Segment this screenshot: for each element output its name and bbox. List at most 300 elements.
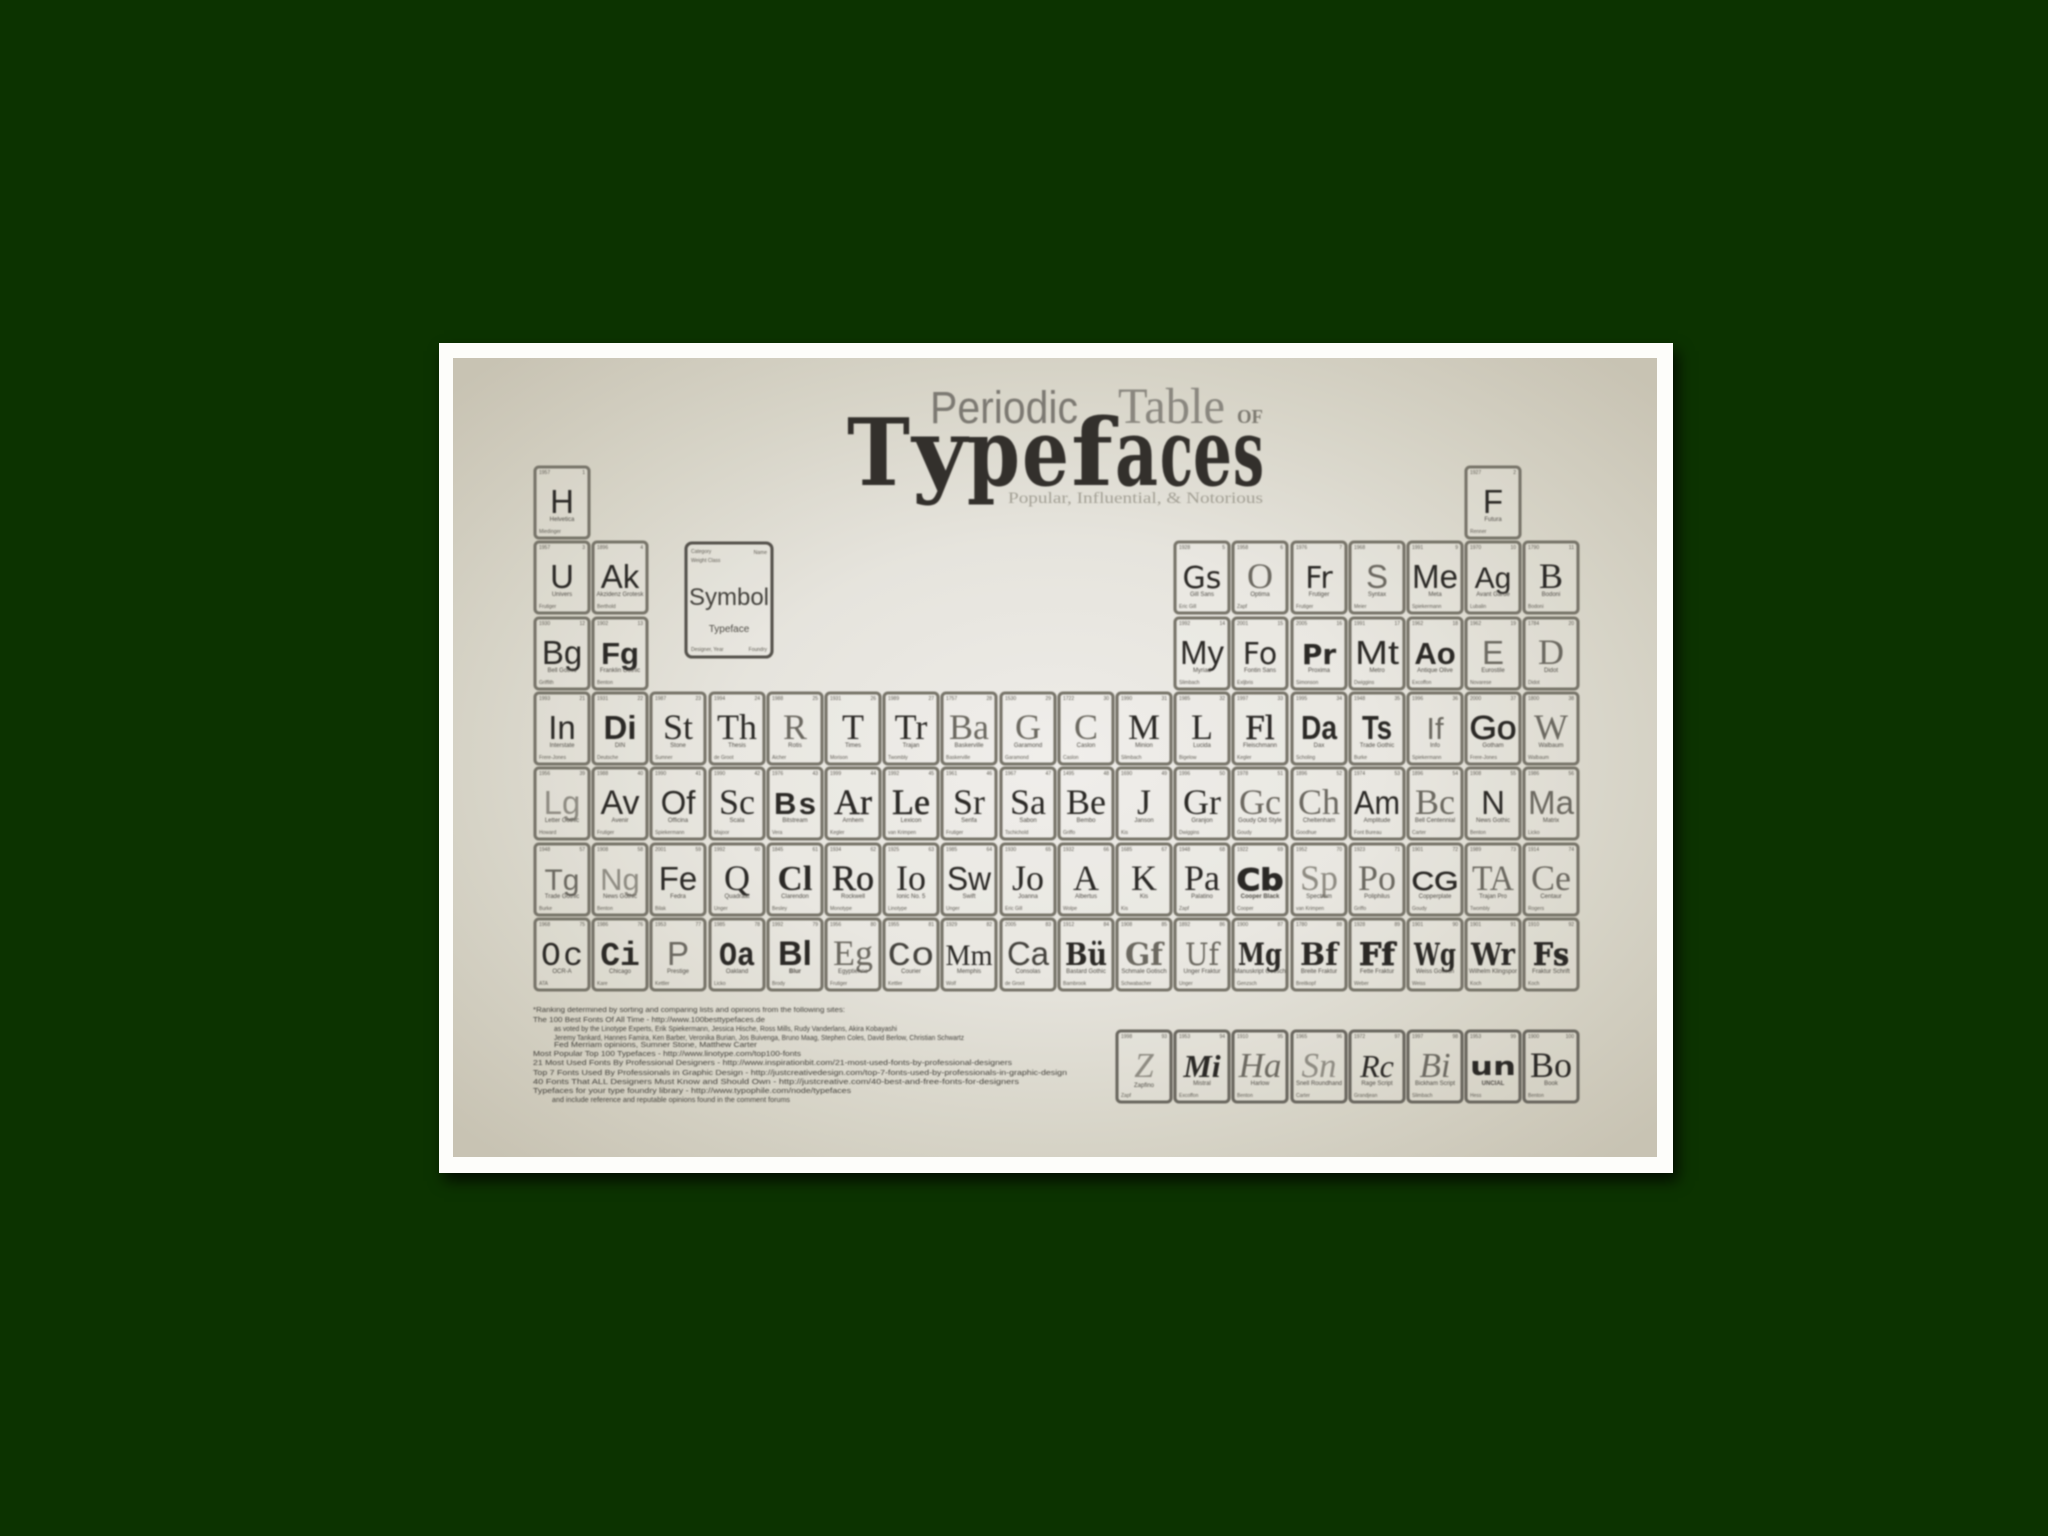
cell: Memphis: Memphis [957,969,981,975]
cell: Oakland: 1985 [714,922,725,928]
cell: Gill Sans: Gill Sans [1190,592,1214,598]
cell: Bank Gothic: Bell Gothic [547,668,577,674]
cell: blackletter Mg: Mg [1238,937,1282,973]
cell: Officina: 41 [695,771,701,777]
cell: Franklin Gothic: Benton [597,680,613,686]
legend cell: Foundry [749,647,767,653]
cell: Rotis: Rotis [788,743,802,749]
cell: Clarendon [768,844,822,915]
cell: Didot: 20 [1568,621,1574,627]
cell: Citizen: Kare [597,981,608,987]
cell: Matrix: 1986 [1528,771,1539,777]
cell: blackletter Bf: Bf [1300,937,1340,973]
cell: Courier: 81 [928,922,934,928]
cell: Snell Roundhand [1292,1031,1346,1102]
cell: Galliard: Goudy Old Style [1238,818,1283,824]
cell: blackletter Uf: Unger [1179,981,1193,987]
cell: Trade Gothic: Burke [1354,755,1367,761]
cell: Gill Sans: Eric Gill [1179,604,1196,610]
title block: e [1193,398,1232,507]
cell: Hobo: Benton [1237,1093,1253,1099]
cell: Rockwell: 62 [870,847,876,853]
cell: Palatino: 1948 [1179,847,1190,853]
cell: Janson [1117,768,1171,839]
cell: Poliphilus: 1923 [1354,847,1365,853]
cell: Lucida: 32 [1219,696,1225,702]
cell: Joanna: Joanna [1018,894,1039,900]
cell: Fontin: Fo [1243,637,1277,672]
cell: Info: If [1426,711,1444,746]
cell: Rockwell [826,844,880,915]
cell: News Gothic: 55 [1510,771,1516,777]
cell: Fontin: Fontin Sans [1244,668,1276,674]
cell: Frutiger: 1976 [1296,545,1307,551]
cell: Caslon: Caslon [1063,755,1079,761]
cell: Trade Gothic: 35 [1394,696,1400,702]
cell: Clarendon: 1845 [772,847,783,853]
cell: Letter Gothic: Howard [539,830,556,836]
legend cell: Name [754,550,767,556]
footnotes: *Ranking determined by sorting and comparing lists and opinions from the following sites: [533,1007,845,1014]
cell: Trajan light: Twombly [1470,906,1490,912]
cell: Mt: 1991 [1354,621,1365,627]
cell: Arnhem: Ar [834,782,872,822]
cell: blackletter Mg [1233,919,1287,990]
cell: Courier: Kettler [888,981,903,987]
title block: T [847,398,910,507]
cell: Info [1408,693,1462,764]
cell: Sabon [1001,768,1055,839]
cell: OCR A: Oc [541,938,583,975]
cell: Helvetica: 1957 [539,470,550,476]
cell: Didot: D [1538,632,1564,672]
cell: Meta: 1991 [1412,545,1423,551]
cell: Myriad [1175,618,1229,689]
cell: blackletter Gf: Schmale Gotisch [1121,969,1167,975]
cell: Arnhem: Kegler [830,830,845,836]
cell: Spectrum: 1952 [1296,847,1307,853]
cell: Futura: 1927 [1470,470,1481,476]
cell: OCR A [535,919,589,990]
cell: blackletter Ff: Fette Fraktur [1360,969,1394,975]
cell: Mt: Mt [1355,634,1399,671]
cell: blackletter Gf: Schwabacher [1121,981,1152,987]
cell: Zapfino: 1998 [1121,1034,1132,1040]
cell: Centaur: Ce [1531,858,1571,898]
cell: News Gothic [1466,768,1520,839]
cell: Stone [651,693,705,764]
cell: Bembo: 1495 [1063,771,1074,777]
cell: Cheltenham [1292,768,1346,839]
cell: Copperplate Gothic: 72 [1452,847,1458,853]
cell: Minion: M [1128,707,1160,747]
cell: Avenir: 1988 [597,771,608,777]
cell: Hobo [1233,1031,1287,1102]
cell: Baskerville [942,693,996,764]
cell: Didot [1524,618,1578,689]
cell: Bank Gothic: 12 [579,621,585,627]
cell: Trade Gothic light [535,844,589,915]
cell: Georgia [1175,768,1229,839]
cell: Antique Olive: Ao [1414,636,1456,671]
cell: Avenir: 40 [637,771,643,777]
cell: Bodoni Ornate: Book [1544,1081,1559,1087]
footnotes: 21 Most Used Fonts By Professional Designers - http://www.inspirationbit.com/21-most-used-fonts-by-professional-designers [533,1060,1013,1067]
cell: Garamond: Garamond [1014,743,1042,749]
cell: blackletter Ff: Weber [1354,981,1369,987]
cell: Prestige: P [667,935,689,972]
cell: Lexicon: Lexicon [901,818,921,824]
cell: Akzidenz Grotesk: 1896 [597,545,608,551]
cell: Helvetica [535,467,589,538]
cell: Janson: Janson [1134,818,1154,824]
cell: Optima: 1958 [1237,545,1248,551]
cell: Times: T [842,707,864,747]
cell: Centaur [1524,844,1578,915]
cell: DIN: 1931 [597,696,608,702]
cell: Clarendon: Cl [778,859,813,898]
cell: Bodoni: Bodoni [1528,604,1544,610]
cell: Bs: Bs [774,786,816,821]
cell: blackletter Wr: 91 [1510,922,1516,928]
cell: Eurostile: 1962 [1470,621,1481,627]
cell: Garamond: 1530 [1005,696,1016,702]
cell: Minion: Minion [1135,743,1153,749]
cell: Egyptienne [826,919,880,990]
cell: Interstate: Interstate [549,743,575,749]
cell: News Gothic light: 1908 [597,847,608,853]
cell: blackletter Wg: Weiss [1412,981,1426,987]
cell: Uncial: 99 [1510,1034,1516,1040]
cell: News Gothic light: Ng [600,862,640,897]
cell: Avant Garde: 10 [1510,545,1516,551]
cell: blackletter Wr: 1901 [1470,922,1481,928]
cell: Bickham Script: 98 [1452,1034,1458,1040]
cell: Trajan light: TA [1472,858,1514,898]
cell: DIN: 22 [637,696,643,702]
cell: Swift: 1985 [946,847,957,853]
cell: Galliard [1233,768,1287,839]
cell: Courier: Co [888,938,934,975]
cell: Trade Gothic: Ts [1362,709,1392,746]
cell: Proxima: 16 [1336,621,1342,627]
footnotes: Jeremy Tankard, Hannes Famira, Ken Barber, Veronika Burian, Jos Buivenga, Bruno Maag, Stephen Coles, David Berlow, Christian Schwartz [554,1035,964,1042]
cell: Trade Gothic light: Burke [539,906,552,912]
cell: Joanna: Eric Gill [1005,906,1022,912]
cell: Janson: Kis [1121,830,1128,836]
cell: Frutiger: Fr [1305,561,1333,596]
cell: Letter Gothic: Letter Gothic [545,818,579,824]
cell: Egyptienne: Eg [833,933,873,973]
cell: Garamond: Garamond [1005,755,1029,761]
cell: Spectrum: 70 [1336,847,1342,853]
cell: Fedra: 59 [695,847,701,853]
cell: Matrix [1524,768,1578,839]
cell: Egyptienne: Frutiger [830,981,848,987]
cell: Scala: 1990 [714,771,725,777]
cell: Optima: 6 [1280,545,1283,551]
cell: Syntax: 8 [1397,545,1400,551]
cell: Optima: O [1247,556,1273,596]
cell: Gill Sans [1175,542,1229,613]
cell: Zapfino [1117,1031,1171,1102]
cell: Walbaum: W [1534,707,1568,747]
cell: Univers: U [550,558,574,595]
cell: Akzidenz Grotesk: Ak [601,558,640,595]
cell: Memphis: Mm [946,939,992,972]
cell: OCR A: 1968 [539,922,550,928]
cell: blackletter Gf [1117,919,1171,990]
cell: Dax: Dax [1314,743,1324,749]
cell: Gill Sans: 5 [1222,545,1225,551]
cell: Joanna: 1930 [1005,847,1016,853]
cell: OCR A: ATA [539,981,549,987]
cell: Meta: Meta [1428,592,1442,598]
cell: Franklin Gothic [593,618,647,689]
cell: Dax: 34 [1336,696,1342,702]
cell: Blur: Bl [778,935,812,973]
cell: Gotham: Go [1470,709,1516,746]
cell: Georgia: Granjon [1191,818,1213,824]
cell: Gill Sans: Gs [1183,561,1221,596]
cell: blackletter Ff: Ff [1359,937,1397,973]
cell: Trajan [884,693,938,764]
cell: Lexicon [884,768,938,839]
cell: Swift: Swift [962,894,976,900]
cell: Bank Gothic [535,618,589,689]
cell: Bembo: 48 [1103,771,1109,777]
cell: Ionic: Linotype [888,906,907,912]
cell: Consolas: de Groot [1005,981,1025,987]
cell: blackletter Mg: Manuskript Gotisch [1234,969,1286,975]
cell: Trade Gothic [1350,693,1404,764]
cell: Minion: 1990 [1121,696,1132,702]
cell: Fleischmann [1233,693,1287,764]
cell: Cooper Black [1233,844,1287,915]
cell: Mistral: 94 [1219,1034,1225,1040]
cell: Memphis: 1929 [946,922,957,928]
cell: Info: 36 [1452,696,1458,702]
cell: Kis: K [1131,858,1157,898]
cell: Avenir: Avenir [612,818,628,824]
cell: Spectrum: Sp [1300,858,1338,898]
cell: Helvetica: Miedinger [539,529,561,535]
footnotes: 40 Fonts That ALL Designers Must Know and Should Own - http://justcreative.com/40-best-and-free-fonts-for-designers [533,1079,1020,1086]
cell: Thesis: Th [717,707,757,747]
cell: Ionic: Io [896,858,926,898]
cell: Citizen: Chicago [609,969,632,975]
cell: Trade Gothic: Trade Gothic [1360,743,1394,749]
cell: Myriad: 14 [1219,621,1225,627]
cell: Courier: Courier [901,969,921,975]
cell: Bodoni [1524,542,1578,613]
cell: Minion [1117,693,1171,764]
cell: blackletter Uf: 86 [1219,922,1225,928]
cell: Antique Olive: Excoffon [1412,680,1432,686]
cell: Akzidenz Grotesk: Akzidenz Grotesk [596,592,645,598]
cell: blackletter Wr [1466,919,1520,990]
cell: Mt [1350,618,1404,689]
cell: Fleischmann: Kegler [1237,755,1252,761]
cell: Arnhem: 44 [870,771,876,777]
cell: Officina: Spiekermann [655,830,685,836]
cell: Trade Gothic light: 57 [579,847,585,853]
cell: blackletter Ff: 89 [1394,922,1400,928]
cell: Galliard: Gc [1239,782,1281,822]
cell: Ionic: Ionic No. 5 [897,894,926,900]
cell: Scala: Sc [719,782,755,822]
footnotes: The 100 Best Fonts Of All Time - http://www.100besttypefaces.de [533,1017,765,1024]
cell: Bickham Script: Slimbach [1412,1093,1433,1099]
cell: Optima: Optima [1250,592,1270,598]
cell: Trajan: Twombly [888,755,908,761]
cell: Blur: 79 [812,922,818,928]
cell: Mistral: 1953 [1179,1034,1190,1040]
cell: Scala: Majoor [714,830,730,836]
legend cell: Symbol [689,584,769,611]
cell: Univers: Frutiger [539,604,557,610]
cell: Swift: Sw [947,860,991,897]
cell: Times: Times [845,743,861,749]
legend cell: Typeface [709,624,750,635]
cell: Avenir: Frutiger [597,830,615,836]
cell: Kis: 67 [1161,847,1167,853]
cell: Kis: Kis [1140,894,1148,900]
cell: Times: Morison [830,755,848,761]
cell: Snell Roundhand: Carter [1296,1093,1310,1099]
cell: Citizen: Ci [600,938,640,975]
cell: Officina [651,768,705,839]
cell: Syntax: Meier [1354,604,1367,610]
cell: Snell Roundhand: 1965 [1296,1034,1307,1040]
cell: Kis: 1685 [1121,847,1132,853]
cell: Consolas: Consolas [1015,969,1041,975]
cell: Sr: Frutiger [946,830,964,836]
cell: Centaur: Rogers [1528,906,1545,912]
cell: blackletter Fs [1524,919,1578,990]
cell: Dax: Da [1301,709,1338,746]
cell: Poliphilus: 71 [1394,847,1400,853]
footnotes: Typefaces for your type foundry library - http://www.typophile.com/node/typefaces [533,1088,852,1095]
cell: blackletter Bü: Bastard Gothic [1066,969,1106,975]
cell: Hobo: Harlow [1251,1081,1270,1087]
cell: blackletter Bü: 1912 [1063,922,1074,928]
cell: American Typewriter [1350,768,1404,839]
cell: Meta: 9 [1455,545,1458,551]
cell: News Gothic light: 58 [637,847,643,853]
cell: Eurostile: Eurostile [1481,668,1505,674]
cell: Swift: Unger [946,906,960,912]
cell: Ionic [884,844,938,915]
cell: Stone: 1987 [655,696,666,702]
cell: Bickham Script: Bi [1419,1046,1451,1085]
cell: Uncial: Hess [1470,1093,1482,1099]
cell: Bodoni Ornate [1524,1031,1578,1102]
cell: Bs: 1976 [772,771,783,777]
cell: Mt: Metro [1369,668,1385,674]
cell: Lucida: L [1191,707,1213,747]
cell: Janson: 49 [1161,771,1167,777]
cell: blackletter Bf [1292,919,1346,990]
cell: Thesis: 24 [754,696,760,702]
cell: Univers: 1957 [539,545,550,551]
cell: Garamond [1001,693,1055,764]
cell: Optima [1233,542,1287,613]
cell: Oakland: Licko [714,981,726,987]
cell: News Gothic: 1908 [1470,771,1481,777]
cell: Walbaum: Walbaum [1528,755,1549,761]
cell: Hobo: Ha [1238,1046,1281,1085]
cell: Hobo: 95 [1277,1034,1283,1040]
cell: Swift [942,844,996,915]
cell: Arnhem: Arnhem [842,818,864,824]
cell: Cooper Black: 1922 [1237,847,1248,853]
cell: Caslon [1059,693,1113,764]
cell: Eurostile: 19 [1510,621,1516,627]
cell: Rc: 1972 [1354,1034,1365,1040]
cell: Fontin: 15 [1277,621,1283,627]
cell: Poliphilus: Griffo [1354,906,1366,912]
cell: Janson: 1690 [1121,771,1132,777]
cell: Frutiger [1292,542,1346,613]
cell: Mistral: Excoffon [1179,1093,1199,1099]
title block: f [1071,398,1118,507]
cell: Sabon: Tschichold [1005,830,1029,836]
cell: Rc: Rage Script [1361,1081,1393,1087]
cell: Akzidenz Grotesk: Berthold [597,604,616,610]
cell: Thesis: 1994 [714,696,725,702]
cell: Scala [710,768,764,839]
cell: Baskerville: Baskerville [954,743,984,749]
cell: Egyptienne: Egyptienne [838,969,869,975]
cell: Info: Spiekermann [1412,755,1442,761]
cell: Bodoni Ornate: Benton [1528,1093,1544,1099]
cell: Myriad: 1992 [1179,621,1190,627]
cell: Prestige: Kettler [655,981,670,987]
cell: Myriad: Myriad [1193,668,1211,674]
cell: Zapfino: Z [1134,1046,1154,1085]
cell: Egyptienne: 1956 [830,922,841,928]
cell: Bickham Script: 1997 [1412,1034,1423,1040]
cell: Garamond: G [1015,707,1041,747]
footnotes: as voted by the Linotype Experts, Erik Spiekermann, Jessica Hische, Ross Mills, Rudy Vanderlans, Akira Kobayashi [554,1026,897,1033]
cell: Gotham: Gotham [1482,743,1504,749]
cell: Sabon: 1967 [1005,771,1016,777]
cell: Avant Garde: Avant Garde [1476,592,1510,598]
cell: Uncial: UNCIAL [1482,1081,1505,1087]
cell: DIN: Di [604,709,636,746]
cell: American Typewriter: 1974 [1354,771,1365,777]
cell: Centaur: Centaur [1540,894,1562,900]
cell: Lucida: Bigelow [1179,755,1197,761]
cell: Ionic: 1925 [888,847,899,853]
cell: News Gothic: Benton [1470,830,1486,836]
cell: Interstate: In [548,709,576,746]
cell: Trajan light: Trajan Pro [1479,894,1508,900]
cell: Bc: 1896 [1412,771,1423,777]
cell: Bembo: Be [1066,782,1106,822]
cell: blackletter Bü [1059,919,1113,990]
cell: blackletter Uf: Unger Fraktur [1183,969,1221,975]
cell: Thesis: de Groot [714,755,734,761]
cell: Fedra: Fedra [670,894,686,900]
legend cell: Designer, Year [691,647,724,653]
cell: blackletter Uf: 1892 [1179,922,1190,928]
title block: c [1160,398,1193,507]
cell: Lucida [1175,693,1229,764]
cell: Sr: Sr [953,782,985,822]
cell: Mt: Dwiggins [1354,680,1375,686]
